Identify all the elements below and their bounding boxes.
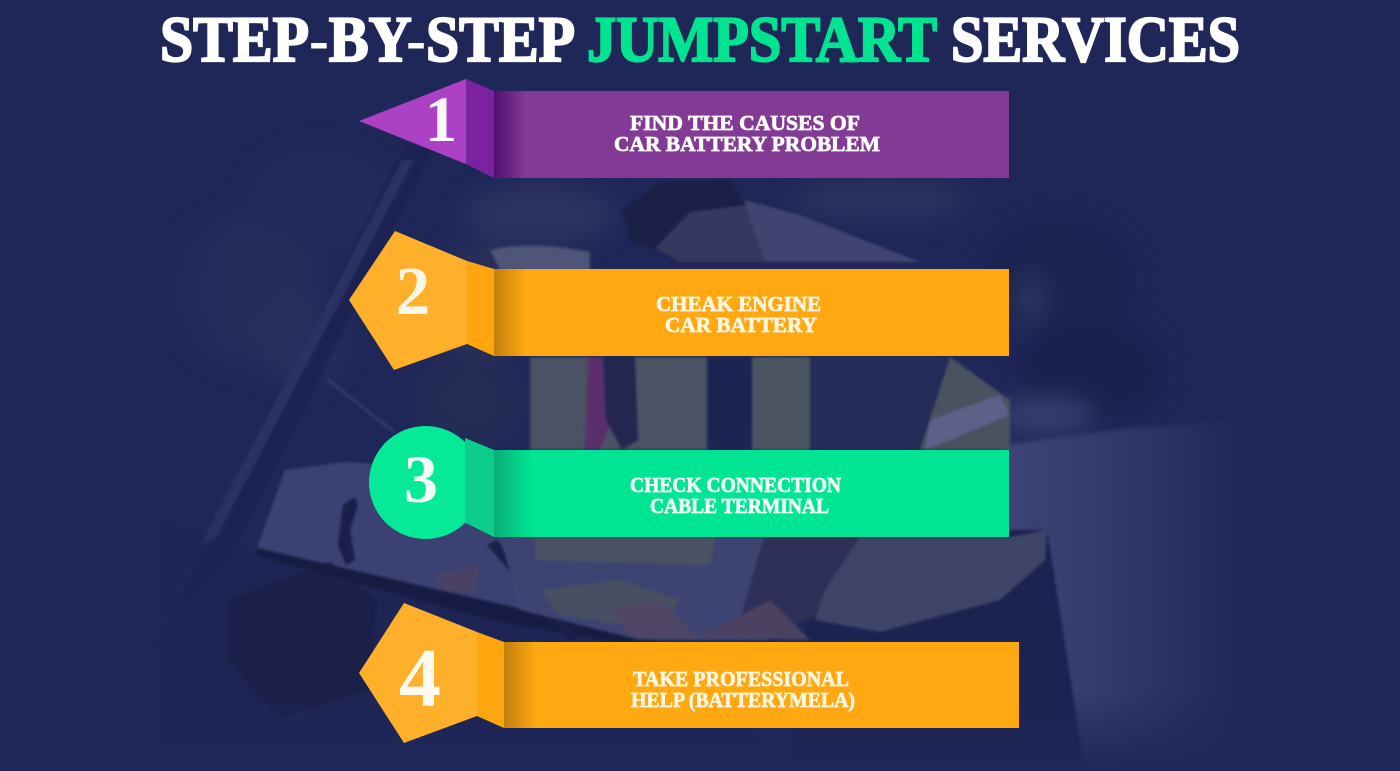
step 3 label: CABLE TERMINAL [650, 494, 829, 518]
step 4 label: TAKE PROFESSIONAL [633, 667, 849, 691]
step 4 banner [359, 603, 1019, 743]
car and open hood [120, 145, 780, 771]
step 1 banner [359, 79, 1009, 178]
step 3 ribbon [494, 450, 1009, 537]
step 2 banner [349, 231, 1009, 370]
step 1 arrow tag [359, 79, 466, 164]
trees [175, 150, 1165, 450]
title: STEP-BY-STEP [160, 4, 575, 76]
step 4 ribbon [504, 642, 1019, 728]
step 1 label: FIND THE CAUSES OF [630, 111, 860, 135]
step 2 label: CAR BATTERY [665, 313, 817, 337]
man [622, 180, 1085, 771]
road [1000, 420, 1245, 771]
title: JUMPSTART [587, 4, 937, 76]
step 2 number: 2 [396, 253, 430, 329]
background photo: mechanics at a car with raised hood [100, 70, 1300, 771]
step 3 banner [369, 426, 1009, 539]
title: SERVICES [951, 4, 1240, 76]
step 3 number: 3 [404, 441, 438, 517]
step 4 label: HELP (BATTERYMELA) [631, 688, 855, 712]
step 2 ribbon [494, 269, 1009, 356]
step 1 label: CAR BATTERY PROBLEM [614, 132, 880, 156]
step 1 ribbon [494, 91, 1009, 178]
step 3 circle tag [369, 426, 482, 539]
step 2 pentagon tag [349, 231, 467, 370]
step 2 label: CHEAK ENGINE [656, 292, 821, 316]
woman [490, 245, 768, 640]
title [160, 4, 1240, 76]
step 4 pentagon tag [359, 603, 477, 743]
photo fade [120, 70, 230, 771]
step 3 label: CHECK CONNECTION [630, 473, 841, 497]
step 4 number: 4 [399, 632, 441, 725]
step 1 number: 1 [425, 84, 457, 156]
